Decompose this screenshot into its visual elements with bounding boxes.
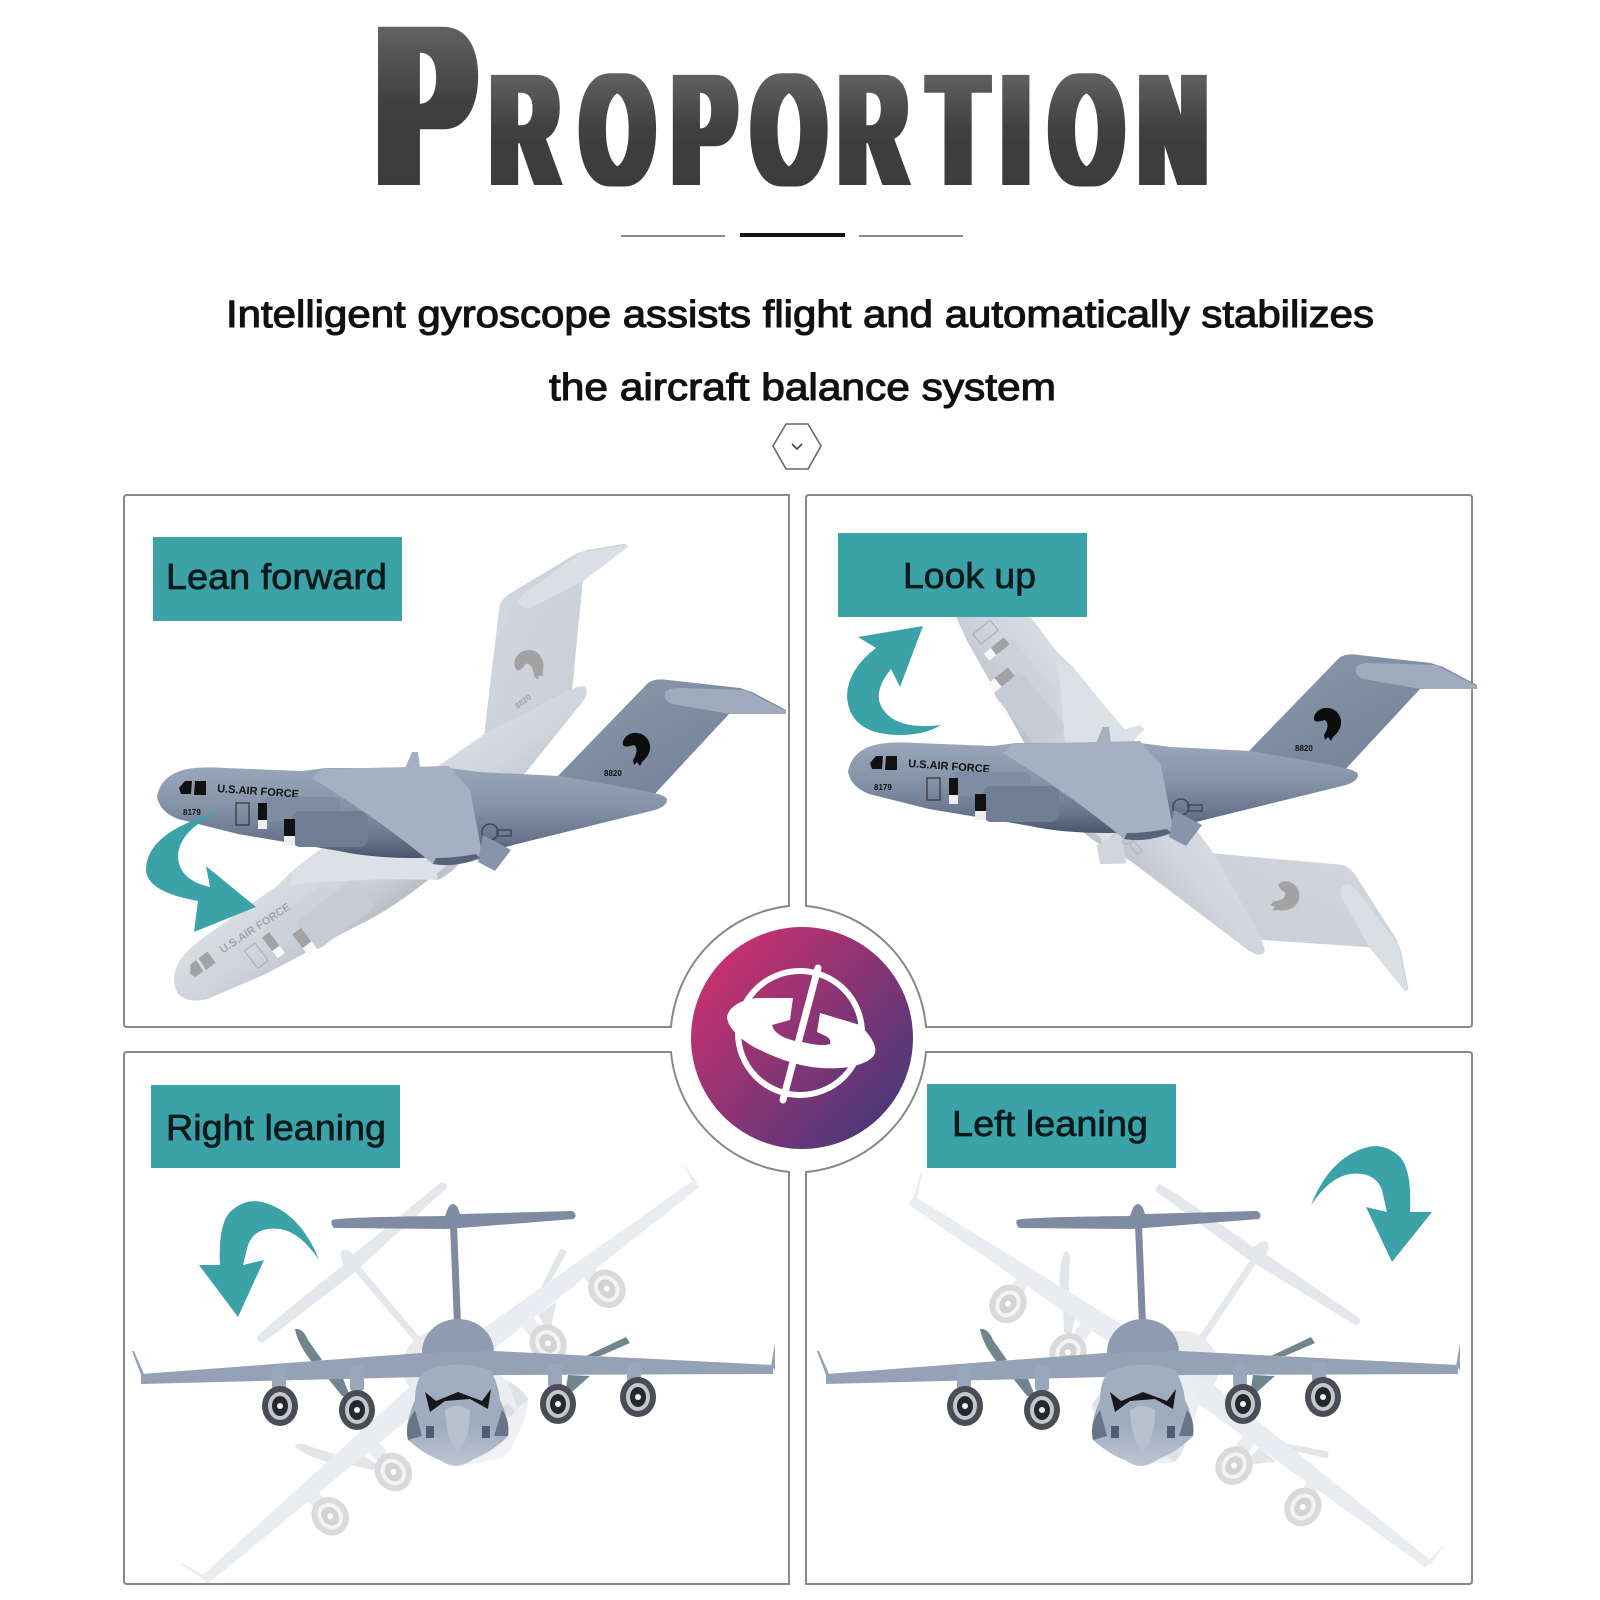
title: R	[840, 40, 906, 219]
main plane: 8179	[183, 808, 201, 817]
arrow: look up	[847, 626, 941, 735]
title: I	[1003, 40, 1029, 219]
ghost plane right leaning	[89, 1052, 757, 1600]
label: look up: Look up	[903, 555, 1036, 596]
main plane	[848, 654, 1477, 846]
title	[380, 0, 1206, 235]
main plane: 8820	[604, 769, 622, 778]
label: right leaning	[151, 1085, 400, 1168]
label: lean forward	[153, 537, 402, 621]
title: O	[1051, 40, 1122, 219]
panel: right leaning	[89, 1052, 789, 1600]
main plane front view	[817, 1204, 1460, 1466]
title: T	[930, 40, 986, 219]
icon: gyroscope badge	[691, 927, 913, 1149]
subtitle text	[226, 294, 1374, 409]
panel: left leaning	[806, 1052, 1527, 1600]
ghost plane looking up	[887, 481, 1432, 1090]
main plane: U.S.AIR FORCE	[908, 758, 990, 776]
arrow: lean forward	[146, 812, 256, 932]
divider lines	[621, 233, 963, 237]
subtitle text: the aircraft balance system	[549, 367, 1056, 409]
panel: look up	[806, 481, 1477, 1090]
main plane: 8820	[1295, 744, 1313, 753]
title: N	[1140, 40, 1206, 219]
icon: hexagon chevron	[773, 424, 821, 469]
ghost plane leaning forward	[107, 519, 723, 1053]
title: R	[492, 40, 558, 219]
label: left leaning	[927, 1084, 1176, 1168]
title: P	[674, 40, 735, 219]
title: O	[754, 40, 824, 219]
label: right leaning: Right leaning	[166, 1107, 386, 1148]
label: look up	[838, 533, 1087, 617]
title: O	[582, 40, 653, 219]
arrow: right leaning	[199, 1201, 319, 1317]
label: left leaning: Left leaning	[952, 1103, 1148, 1144]
main plane	[157, 679, 786, 871]
main plane: 8179	[874, 783, 892, 792]
main plane front view	[132, 1204, 775, 1466]
label: lean forward: Lean forward	[166, 556, 387, 597]
panel: lean forward	[107, 495, 789, 1053]
ghost plane leaning forward: 8820	[513, 692, 533, 710]
main plane: U.S.AIR FORCE	[217, 783, 299, 801]
subtitle text: Intelligent gyroscope assists flight and automatically stabilizes	[226, 294, 1374, 336]
ghost plane left leaning	[853, 1053, 1527, 1600]
ghost plane leaning forward: U.S.AIR FORCE	[218, 901, 293, 956]
arrow: left leaning	[1311, 1146, 1432, 1262]
